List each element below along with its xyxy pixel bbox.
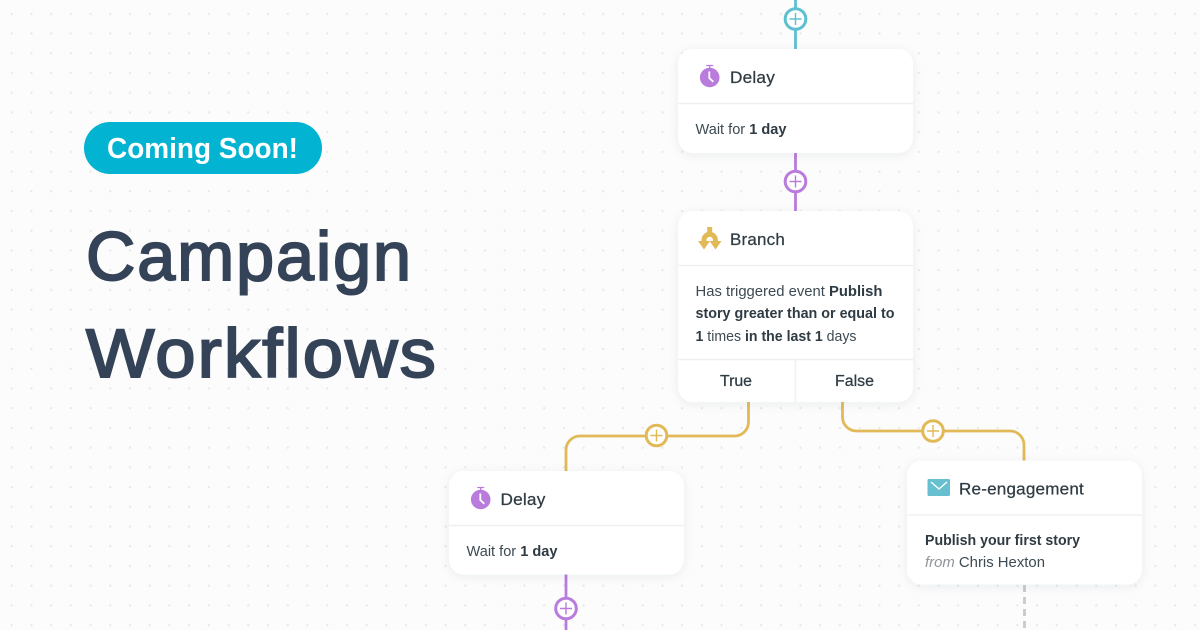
text: condition: 1 times in the last 1 days xyxy=(696,329,856,345)
label: True: True xyxy=(720,373,752,390)
text: condition: story greater than or equal to xyxy=(696,306,895,322)
heading: Delay: Delay xyxy=(500,490,546,509)
connector: true branch with add button xyxy=(566,401,748,472)
title xyxy=(86,218,438,392)
panel: branch card xyxy=(678,211,913,402)
icon: branch arrows xyxy=(698,227,722,250)
icon: envelope xyxy=(928,479,950,496)
connector: false branch with add button xyxy=(842,401,1024,461)
text: wait: Wait for 1 day xyxy=(466,544,558,560)
text: condition xyxy=(696,284,895,345)
panel: re-engagement card xyxy=(907,460,1142,584)
label: False: False xyxy=(835,373,874,390)
connector: purple bottom with add button xyxy=(556,573,576,630)
text: condition: Has triggered event Publish xyxy=(696,284,882,300)
text: wait: Wait for 1 day xyxy=(696,122,786,138)
icon: stopwatch xyxy=(471,488,491,509)
heading: Branch: Branch xyxy=(730,230,785,249)
text: subject: Publish your first story xyxy=(925,533,1080,549)
badge: Coming Soon xyxy=(84,122,322,174)
heading: Delay: Delay xyxy=(730,68,775,87)
panel: delay card left xyxy=(449,471,684,574)
heading: Re-engagement: Re-engagement xyxy=(959,480,1084,498)
text: sender: from Chris Hexton xyxy=(925,555,1045,571)
title: Workflows xyxy=(86,315,438,392)
title: Campaign xyxy=(86,218,413,295)
badge: Coming Soon: Coming Soon! xyxy=(107,133,298,165)
connector: purple after delay with add button xyxy=(785,152,806,212)
connector: teal top with add button xyxy=(785,0,806,50)
icon: stopwatch xyxy=(700,66,720,87)
panel: delay card top xyxy=(678,49,913,153)
connector: dashed grey xyxy=(1023,585,1026,630)
